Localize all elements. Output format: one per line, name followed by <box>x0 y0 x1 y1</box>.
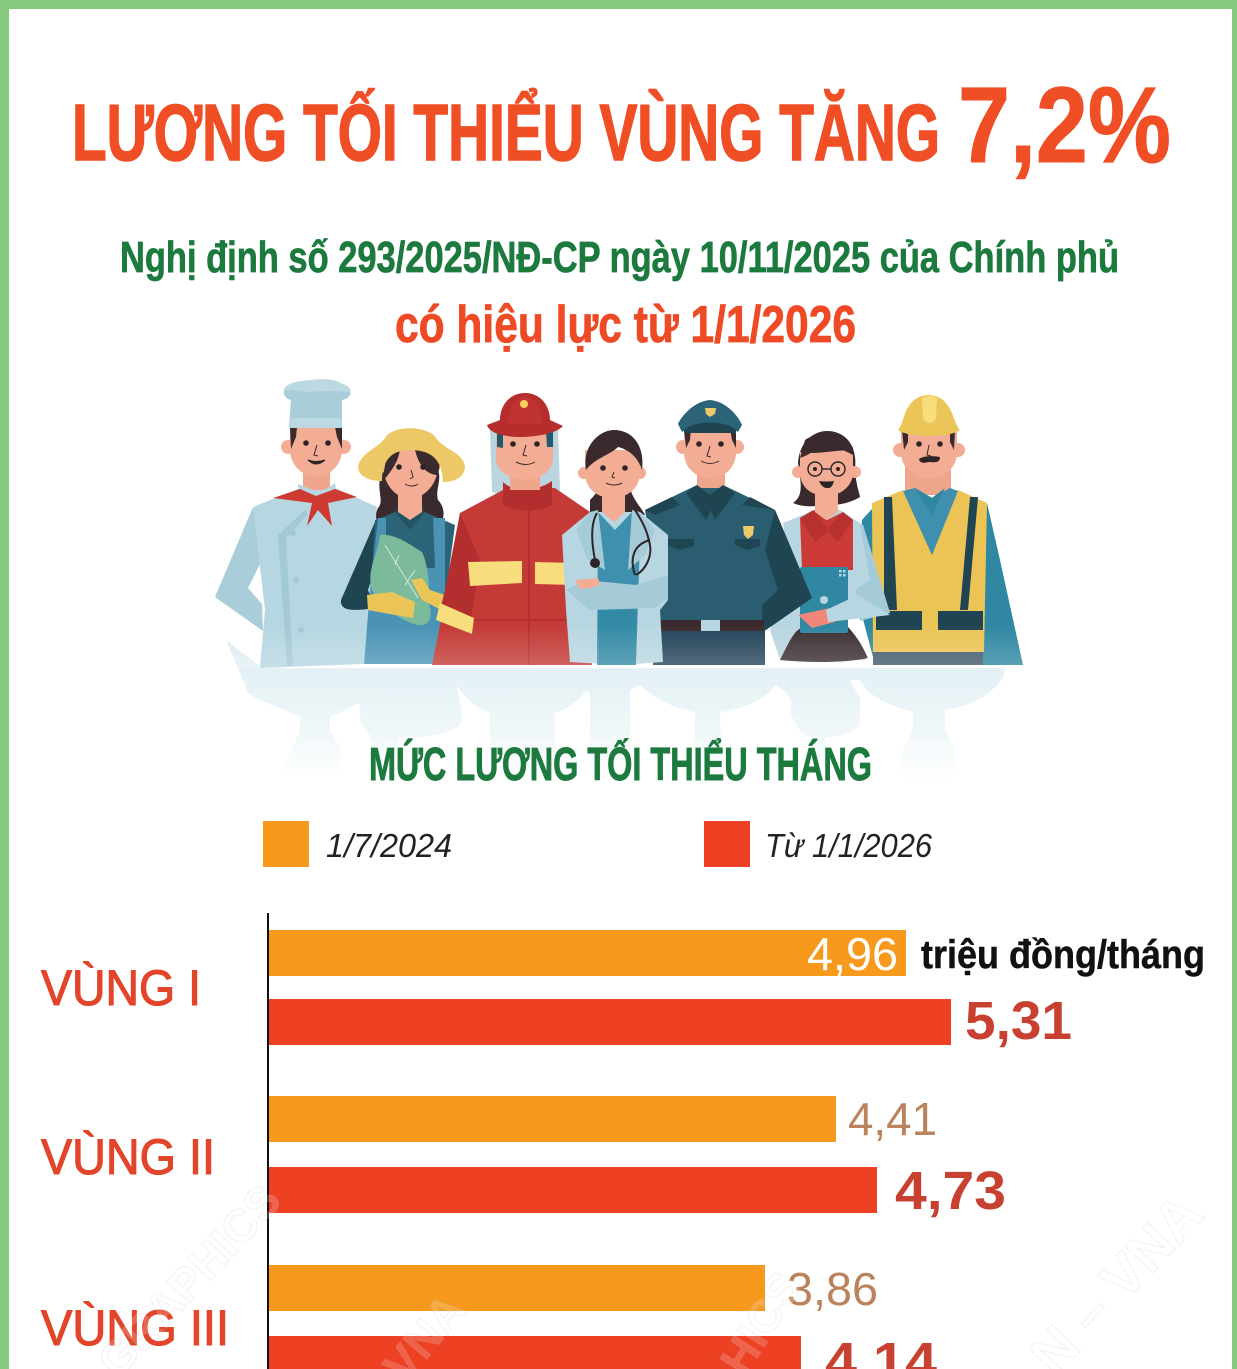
region III <box>41 1263 937 1369</box>
figure: chef <box>215 379 377 668</box>
region I: VÙNG I <box>41 960 201 1016</box>
chart heading: MỨC LƯƠNG TỐI THIỂU THÁNG <box>369 738 872 790</box>
illustration: group of workers <box>215 379 1025 788</box>
subtitle: effective date: có hiệu lực từ 1/1/2026 <box>395 296 856 354</box>
legend item: 1/7/2024: 1/7/2024 <box>326 827 452 864</box>
region II: VÙNG II <box>41 1129 215 1185</box>
region II <box>41 1093 1006 1221</box>
region II: 4,73 <box>895 1161 1006 1221</box>
region III: VÙNG III <box>41 1300 229 1356</box>
region II: 4,41 <box>848 1093 937 1145</box>
reflection below workers <box>226 640 1005 788</box>
legend item: from 1/1/2026 <box>704 821 933 867</box>
chart axis <box>267 913 269 1369</box>
legend item: 1/7/2024 <box>263 821 452 867</box>
bar chart <box>41 913 1205 1369</box>
figure: construction worker <box>858 395 1023 665</box>
figure: farmer with vegetables <box>341 428 465 664</box>
region I: 4,96 <box>807 928 898 980</box>
region I: triệu đồng/tháng <box>921 933 1205 977</box>
title: 7,2% <box>958 64 1171 185</box>
legend item: from 1/1/2026: Từ 1/1/2026 <box>765 827 933 864</box>
region III: 3,86 <box>787 1263 878 1315</box>
region I: 5,31 <box>965 991 1072 1051</box>
figure: woman with tablet <box>770 431 890 662</box>
figure: police officer <box>645 400 812 665</box>
figure: doctor <box>562 430 668 665</box>
watermark <box>87 1174 1214 1369</box>
legend <box>263 821 933 867</box>
figure: firefighter <box>432 393 592 665</box>
fade at the base of the figures <box>215 625 1025 669</box>
region I <box>41 928 1205 1051</box>
